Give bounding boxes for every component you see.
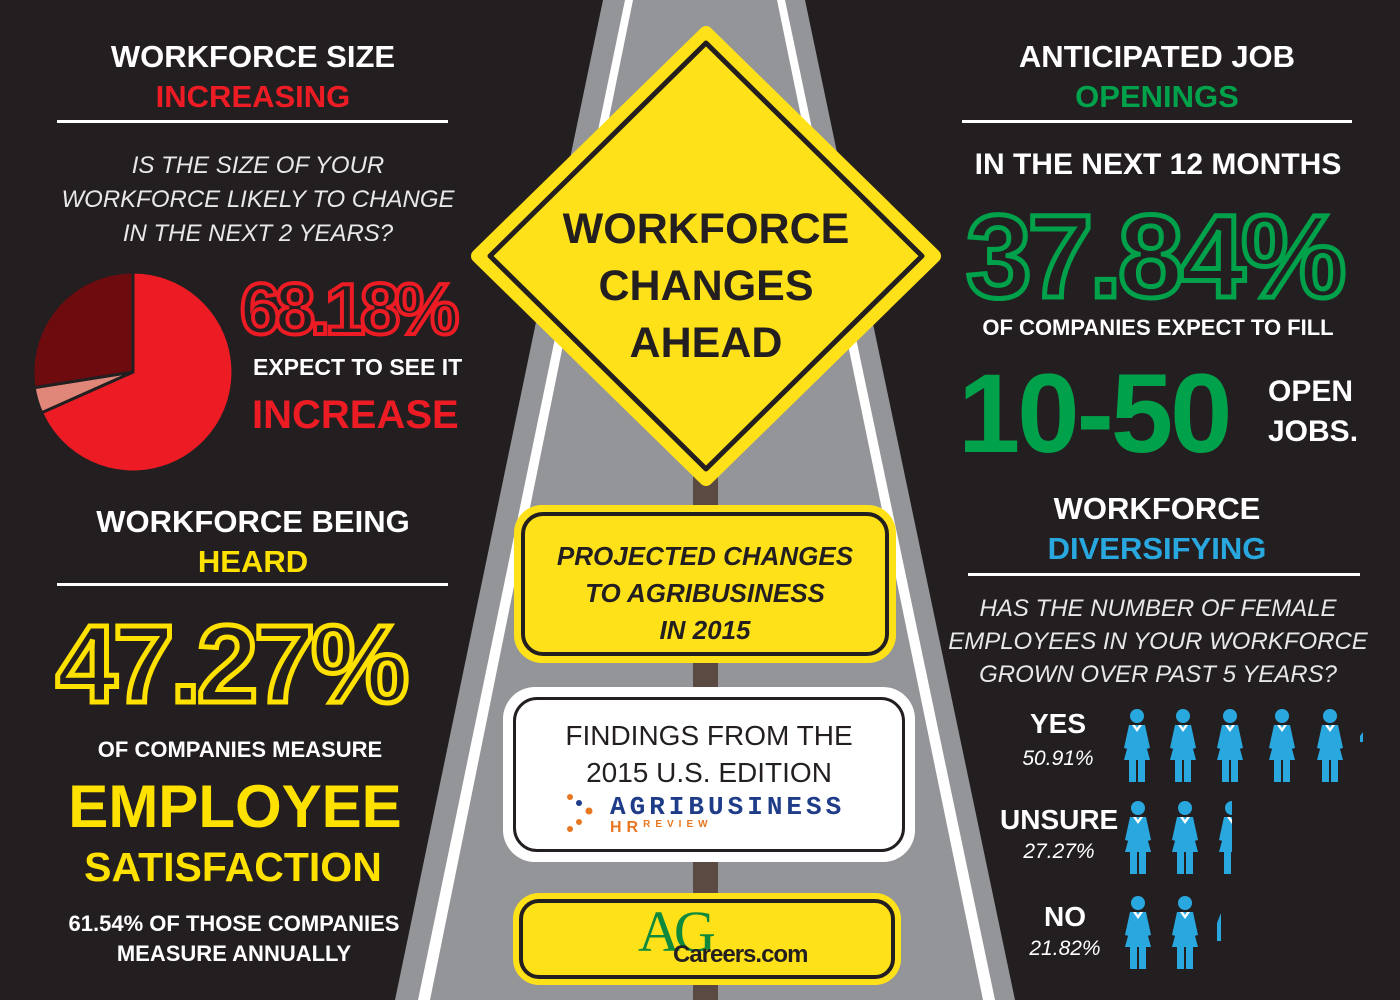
sign: findings: FINDINGS FROM THE [565, 720, 853, 751]
chart: unsure: 27.27% [1023, 840, 1095, 863]
panel: workforce size: EXPECT TO SEE IT [253, 354, 462, 380]
chart: no: NO [1044, 901, 1086, 932]
panel: workforce heard: HEARD [198, 544, 308, 579]
sign title: AHEAD [630, 319, 782, 367]
big number: 68.18% [240, 270, 454, 350]
logo: agribusiness hr review: AGRIBUSINESS [610, 792, 845, 822]
sign title: CHANGES [598, 262, 814, 310]
sign title: WORKFORCE [563, 205, 849, 253]
panel: workforce heard: EMPLOYEE [68, 773, 402, 840]
heading [110, 39, 395, 114]
panel: workforce heard: SATISFACTION [84, 844, 382, 890]
panel: job openings: ANTICIPATED JOB [1019, 39, 1295, 74]
panel: diversifying: GROWN OVER PAST 5 YEARS? [979, 661, 1337, 688]
panel: job openings [958, 39, 1358, 476]
panel: workforce heard: OF COMPANIES MEASURE [98, 737, 382, 762]
panel: job openings: OF COMPANIES EXPECT TO FILL [982, 315, 1334, 340]
chart: yes: 50.91% [1022, 747, 1094, 770]
question: WORKFORCE LIKELY TO CHANGE [62, 186, 454, 213]
panel: job openings: OPENINGS [1075, 79, 1239, 114]
sign: projected changes [514, 505, 896, 663]
pole [693, 470, 718, 1000]
chart: yes [1022, 708, 1363, 782]
chart: yes: YES [1030, 708, 1086, 739]
sign: projected changes: TO AGRIBUSINESS [585, 578, 825, 608]
chart: no: 21.82% [1029, 937, 1101, 960]
big number: 37.84% [966, 191, 1342, 323]
sign: findings: 2015 U.S. EDITION [586, 757, 832, 788]
panel: workforce heard: WORKFORCE BEING [96, 504, 410, 539]
pie chart [34, 274, 232, 470]
chart: unsure [1000, 801, 1232, 874]
sign: projected changes: PROJECTED CHANGES [557, 541, 853, 571]
heading: INCREASING [156, 79, 350, 114]
sign: agcareers: AG [638, 899, 710, 964]
logo: agribusiness hr review: HRREVIEW [610, 819, 713, 836]
panel: diversifying: DIVERSIFYING [1048, 531, 1266, 566]
question [62, 152, 455, 247]
question: IS THE SIZE OF YOUR [132, 152, 384, 179]
panel: diversifying [948, 491, 1368, 688]
panel: diversifying: WORKFORCE [1054, 491, 1260, 526]
panel: workforce heard [55, 504, 448, 966]
big number: 47.27% [56, 603, 405, 726]
panel: diversifying: EMPLOYEES IN YOUR WORKFORCE [948, 628, 1368, 655]
panel: workforce size [34, 39, 462, 470]
sign: agcareers: Careers.com [673, 941, 807, 968]
panel: workforce heard: 61.54% OF THOSE COMPANIES [69, 911, 399, 936]
logo: agribusiness hr review [567, 792, 845, 836]
panel: diversifying: HAS THE NUMBER OF FEMALE [980, 595, 1336, 622]
sign: agcareers [513, 893, 901, 985]
heading: WORKFORCE SIZE [111, 39, 395, 74]
sign: findings [503, 687, 915, 862]
chart: no [1029, 896, 1221, 969]
panel: workforce heard: MEASURE ANNUALLY [117, 941, 351, 966]
panel: job openings: JOBS. [1268, 415, 1358, 448]
sign title [562, 205, 849, 367]
sign: workforce changes ahead [471, 26, 941, 486]
panel: workforce size: INCREASE [252, 393, 459, 437]
question: IN THE NEXT 2 YEARS? [123, 220, 393, 247]
panel: job openings: IN THE NEXT 12 MONTHS [975, 148, 1341, 181]
chart: unsure: UNSURE [1000, 804, 1118, 835]
panel: job openings: OPEN [1268, 375, 1353, 408]
sign: projected changes: IN 2015 [659, 615, 751, 645]
panel: job openings: 10-50 [958, 351, 1229, 476]
